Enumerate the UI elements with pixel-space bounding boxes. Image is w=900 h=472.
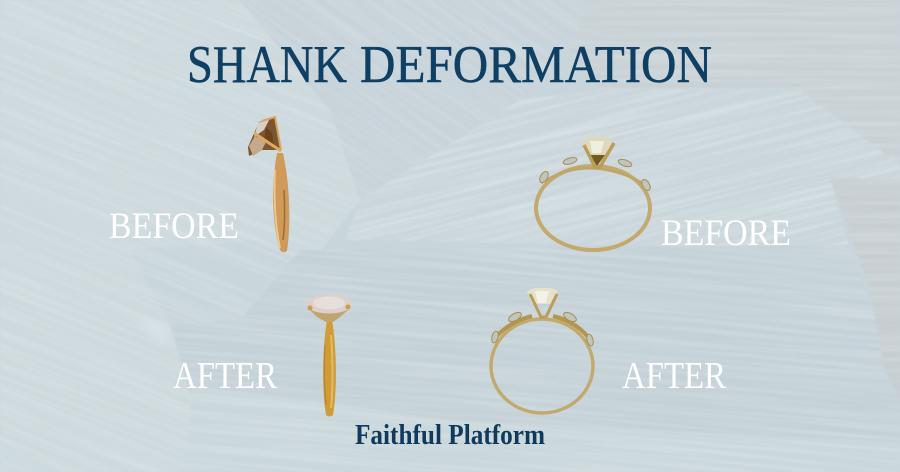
side stones [507,310,523,324]
title: SHANK [187,36,347,94]
band [536,166,650,250]
ring: after, side view [306,294,352,416]
band [491,319,593,413]
footer brand name: Faithful Platform [355,420,545,451]
ring: before, side view [248,117,289,252]
setting [248,117,280,156]
side stones [562,156,578,166]
label: before left: BEFORE [109,206,239,247]
prongs [590,155,605,166]
center stone [582,137,613,156]
label: after left: AFTER [173,355,278,397]
ring: before, front view [536,137,652,250]
prongs [530,294,557,317]
setting [310,310,348,322]
label: before right: BEFORE [661,213,791,254]
center stone [527,288,558,304]
label: after right: AFTER [622,355,727,397]
shank [323,320,336,416]
shank [273,153,289,252]
ring: after, front view [491,288,594,413]
title: DEFORMATION [360,36,712,94]
title [187,36,712,94]
